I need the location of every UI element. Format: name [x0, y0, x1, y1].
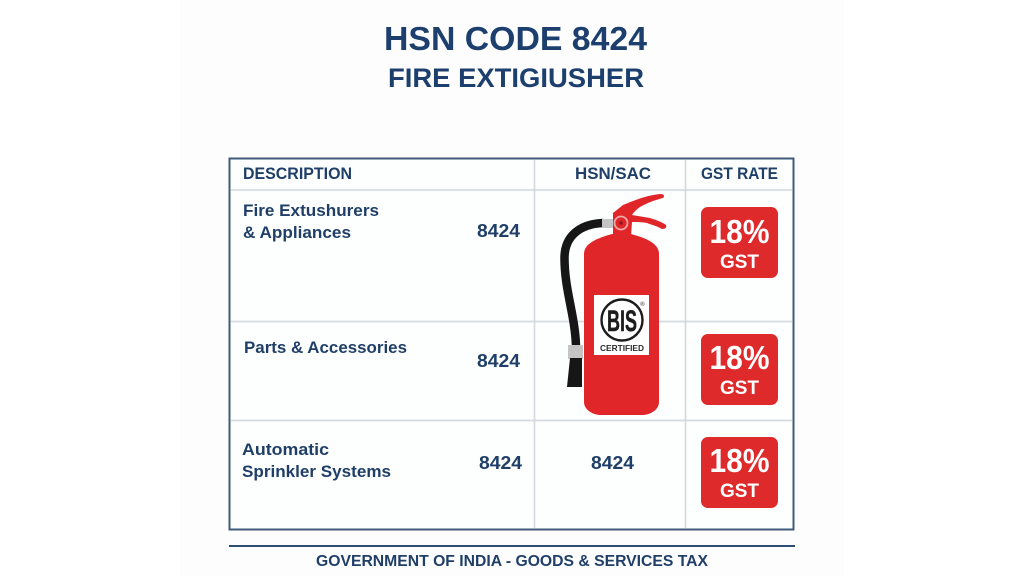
row 3: automatic sprinkler systems [242, 440, 634, 481]
badge: 18% GST row 2: GST [720, 378, 759, 399]
valve handle [613, 194, 666, 236]
table header row: GST RATE [701, 165, 778, 183]
row 1: fire extinguishers: Fire Extushurers [243, 201, 379, 220]
icon: fire extinguisher [564, 194, 666, 415]
table header row: HSN/SAC [575, 165, 651, 183]
title: HSN CODE 8424 [384, 20, 648, 57]
row 3: automatic sprinkler systems: Automatic [242, 440, 329, 459]
BIS label [594, 295, 649, 355]
badge: 18% GST row 2: 18% [710, 339, 770, 376]
table header row: DESCRIPTION [243, 165, 352, 183]
badge: 18% GST row 1 [701, 207, 778, 278]
badge: 18% GST row 2 [701, 334, 778, 405]
footer: GOVERNMENT OF INDIA - GOODS & SERVICES TAX [316, 553, 708, 570]
badge: 18% GST row 3 [701, 437, 778, 508]
row 1: fire extinguishers: & Appliances [243, 223, 351, 242]
badge: 18% GST row 1: 18% [710, 213, 770, 250]
badge: 18% GST row 3: 18% [710, 442, 770, 479]
badge: 18% GST row 1: GST [720, 252, 759, 273]
title [384, 20, 648, 93]
row 3: automatic sprinkler systems: Sprinkler Systems [242, 462, 391, 481]
BIS label: ® [640, 301, 645, 308]
BIS label: BIS [607, 305, 637, 338]
table grid [230, 158, 794, 530]
badge: 18% GST row 3: GST [720, 481, 759, 502]
row 2: parts and accessories: 8424 [477, 351, 520, 371]
row 2: parts and accessories [244, 338, 520, 371]
row 1: fire extinguishers: 8424 [477, 221, 520, 241]
hose [564, 223, 603, 346]
row 3: automatic sprinkler systems: 8424 [479, 453, 522, 473]
nozzle [567, 358, 582, 387]
row 1: fire extinguishers [243, 201, 520, 242]
row 2: parts and accessories: Parts & Accessories [244, 338, 407, 357]
title: FIRE EXTIGIUSHER [388, 63, 644, 93]
row 3: automatic sprinkler systems: 8424 [591, 453, 634, 473]
BIS label: CERTIFIED [600, 344, 644, 353]
cylinder body [584, 234, 659, 415]
table header row [243, 165, 778, 183]
